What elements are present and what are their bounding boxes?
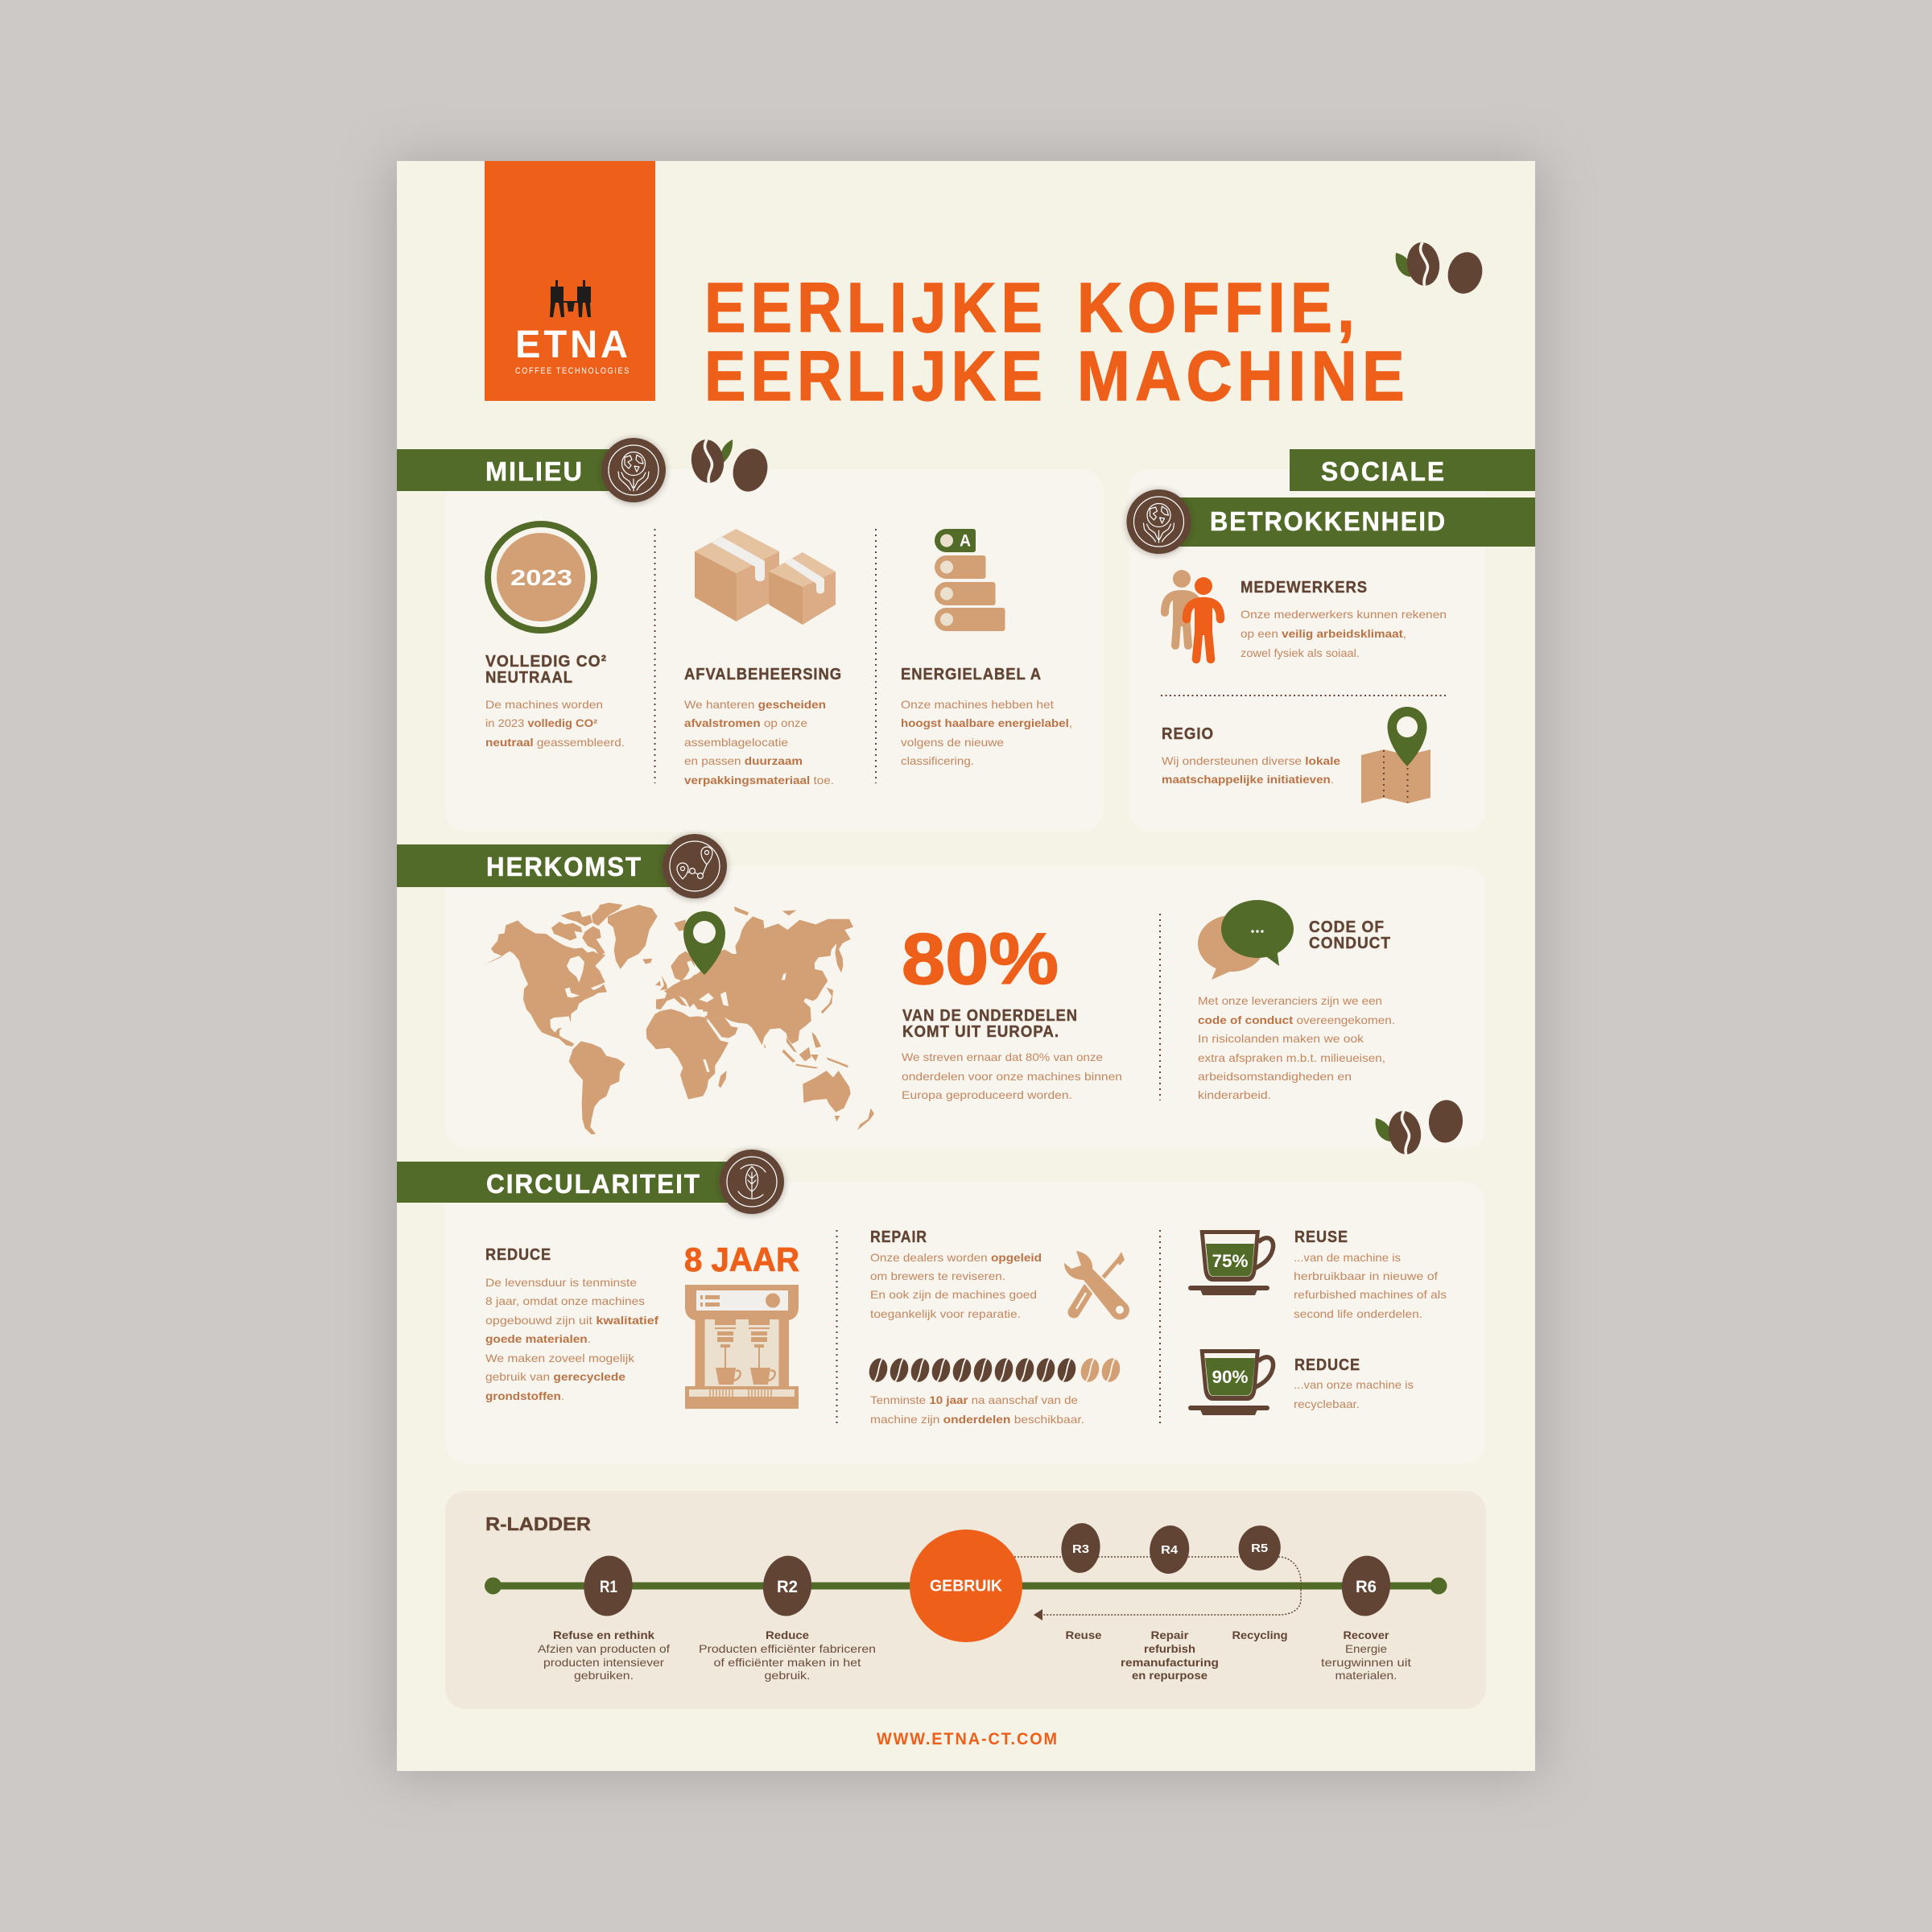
label r6 bbox=[1321, 1629, 1411, 1682]
step r4: R4 bbox=[1161, 1543, 1179, 1557]
map: india bbox=[746, 1023, 779, 1045]
reduce text: gebruik van gerecyclede bbox=[485, 1370, 625, 1383]
label r1 bbox=[538, 1629, 670, 1682]
heading: sociale betrokkenheid: BETROKKENHEID bbox=[1210, 506, 1447, 536]
label r3: Reuse bbox=[1066, 1629, 1102, 1641]
icon: cup 75% bbox=[1188, 1230, 1274, 1295]
body text bbox=[684, 698, 834, 786]
body text: neutraal geassembleerd. bbox=[485, 736, 625, 749]
heading: AFVALBEHEERSING bbox=[684, 666, 842, 683]
icon: bean row 10 of 12 bbox=[867, 1356, 1122, 1384]
reduce text: 8 jaar, omdat onze machines bbox=[485, 1294, 645, 1307]
label r2: of efficiënter maken in het bbox=[713, 1656, 861, 1669]
code of conduct text: Met onze leveranciers zijn we een bbox=[1198, 994, 1382, 1007]
onderdelen text: Tenminste 10 jaar na aanschaf van de bbox=[870, 1393, 1078, 1406]
body text: We hanteren gescheiden bbox=[684, 698, 826, 711]
step r6 bbox=[1339, 1554, 1393, 1618]
reuse text: ...van de machine is bbox=[1294, 1251, 1401, 1264]
divider bbox=[654, 529, 655, 783]
reduce text: goede materialen . bbox=[485, 1332, 591, 1345]
label r6: Energie bbox=[1345, 1642, 1387, 1655]
heading: NEUTRAAL bbox=[485, 669, 573, 687]
code of conduct text: code of conduct overeengekomen. bbox=[1198, 1013, 1395, 1026]
heading bbox=[485, 653, 607, 687]
code of conduct text: extra afspraken m.b.t. milieueisen, bbox=[1198, 1051, 1385, 1064]
heading: circulariteit: CIRCULARITEIT bbox=[486, 1169, 701, 1199]
map: malay peninsula bbox=[786, 1037, 797, 1052]
reuse text bbox=[1294, 1228, 1447, 1320]
step r2 bbox=[760, 1554, 815, 1618]
label r1: gebruiken. bbox=[574, 1669, 634, 1682]
reuse text: herbruikbaar in nieuwe of bbox=[1294, 1269, 1438, 1282]
regio text: Wij ondersteunen diverse lokale bbox=[1162, 754, 1340, 767]
reuse text: second life onderdelen. bbox=[1294, 1307, 1422, 1320]
label r6: materialen. bbox=[1335, 1669, 1397, 1682]
icon: etna figures bbox=[550, 280, 591, 317]
step r5: R5 bbox=[1251, 1542, 1268, 1555]
r-ladder timeline bbox=[485, 1521, 1447, 1642]
world map bbox=[485, 902, 874, 1134]
title: EERLIJKE bbox=[704, 337, 1047, 415]
panel: r-ladder background bbox=[445, 1491, 1486, 1709]
medewerkers text bbox=[1241, 579, 1447, 659]
code of conduct text bbox=[1198, 919, 1395, 1101]
icon: 2023 badge bbox=[488, 524, 594, 630]
milieu: co2 neutraal column bbox=[485, 524, 625, 749]
body text: hoogst haalbare energielabel , bbox=[901, 716, 1072, 729]
icon: 2023 badge: 2023 bbox=[510, 565, 572, 590]
logo wordmark: ETNA bbox=[515, 324, 631, 366]
body text: verpakkingsmateriaal toe. bbox=[684, 774, 834, 786]
step r5 bbox=[1234, 1521, 1285, 1575]
repair text: Onze dealers worden opgeleid bbox=[870, 1251, 1042, 1264]
label r4 bbox=[1121, 1629, 1219, 1682]
reduce text: We maken zoveel mogelijk bbox=[485, 1352, 635, 1364]
body text: en passen duurzaam bbox=[684, 754, 803, 767]
icon: speech bubbles bbox=[1198, 900, 1294, 980]
heading: ENERGIELABEL A bbox=[901, 666, 1042, 683]
icon: cup 90% bbox=[1188, 1349, 1274, 1415]
panel: circulariteit background bbox=[445, 1182, 1486, 1463]
medewerkers text: op een veilig arbeidsklimaat , bbox=[1241, 627, 1406, 640]
repair text: om brewers te reviseren. bbox=[870, 1269, 1005, 1282]
label r4: en repurpose bbox=[1132, 1669, 1208, 1682]
regio text bbox=[1162, 725, 1340, 786]
stat: 80%: 80% bbox=[902, 919, 1059, 1000]
reduce recycling text: ...van onze machine is bbox=[1294, 1378, 1414, 1391]
map: arabia bbox=[708, 1018, 738, 1039]
heading: sociale betrokkenheid: SOCIALE bbox=[1321, 456, 1446, 486]
label r1: producten intensiever bbox=[543, 1656, 664, 1669]
heading: milieu: MILIEU bbox=[485, 456, 584, 486]
step r4 bbox=[1147, 1524, 1191, 1575]
milieu: energielabel column bbox=[901, 529, 1072, 767]
icon: cup 90%: 90% bbox=[1212, 1367, 1248, 1387]
label r4: Repair bbox=[1151, 1629, 1189, 1641]
milieu: afvalbeheersing column bbox=[684, 529, 842, 786]
step r3: R3 bbox=[1072, 1542, 1089, 1556]
icon: hands holding globe bbox=[1127, 489, 1191, 554]
medewerkers text: Onze mederwerkers kunnen rekenen bbox=[1241, 608, 1447, 621]
step r1: R1 bbox=[600, 1578, 617, 1596]
stat: 8 jaar: 8 JAAR bbox=[684, 1241, 799, 1278]
panel: herkomst background bbox=[445, 866, 1486, 1148]
body text: afvalstromen op onze bbox=[684, 716, 807, 729]
onderdelen text: machine zijn onderdelen beschikbaar. bbox=[870, 1413, 1084, 1426]
label r2 bbox=[699, 1629, 876, 1682]
icon: coffee beans herkomst bbox=[1376, 1099, 1464, 1157]
icon: hands holding globe bbox=[601, 438, 666, 502]
reduce text: opgebouwd zijn uit kwalitatief bbox=[485, 1314, 658, 1327]
logo block bbox=[485, 161, 655, 401]
icon: leaf with arrows bbox=[720, 1150, 784, 1214]
code of conduct text: CONDUCT bbox=[1309, 935, 1391, 952]
body text: De machines worden bbox=[485, 698, 603, 711]
icon: energy label bars: A bbox=[960, 531, 971, 551]
body text: Onze machines hebben het bbox=[901, 698, 1054, 711]
icon: coffee beans top right bbox=[1396, 240, 1487, 298]
title bbox=[704, 269, 1410, 415]
label r4: remanufacturing bbox=[1121, 1656, 1219, 1669]
label r6: Recover bbox=[1343, 1629, 1389, 1641]
label r6: terugwinnen uit bbox=[1321, 1656, 1411, 1669]
reuse text: refurbished machines of als bbox=[1294, 1288, 1447, 1301]
heading: herkomst: HERKOMST bbox=[486, 852, 642, 881]
title: KOFFIE, bbox=[1077, 269, 1360, 347]
icon: map with pin bbox=[1361, 707, 1430, 803]
stat text bbox=[902, 1007, 1122, 1101]
heading: milieu bbox=[397, 438, 666, 502]
medewerkers text: MEDEWERKERS bbox=[1241, 579, 1368, 597]
body text bbox=[485, 698, 625, 749]
stat text: We streven ernaar dat 80% van onze bbox=[902, 1051, 1103, 1063]
reduce recycling text bbox=[1294, 1356, 1414, 1410]
step gebruik: GEBRUIK bbox=[930, 1578, 1003, 1596]
label r1: Refuse en rethink bbox=[553, 1629, 654, 1641]
panel: milieu background bbox=[445, 469, 1103, 832]
heading: sociale betrokkenheid bbox=[1127, 449, 1535, 554]
label r2: Producten efficiënter fabriceren bbox=[699, 1642, 876, 1655]
body text: in 2023 volledig CO² bbox=[485, 716, 597, 729]
reduce text: REDUCE bbox=[485, 1246, 551, 1264]
body text: classificering. bbox=[901, 754, 974, 767]
repair text bbox=[870, 1228, 1042, 1320]
step r2: R2 bbox=[777, 1578, 798, 1596]
label r2: Reduce bbox=[766, 1629, 809, 1641]
icon: boxes bbox=[695, 529, 836, 625]
logo tagline: COFFEE TECHNOLOGIES bbox=[515, 366, 630, 376]
heading: circulariteit bbox=[397, 1150, 784, 1214]
icon: wrench and screwdriver bbox=[1064, 1251, 1129, 1319]
reduce text: De levensduur is tenminste bbox=[485, 1276, 637, 1289]
icon: cup 75%: 75% bbox=[1212, 1251, 1248, 1271]
map: indochina bbox=[779, 1028, 799, 1044]
onderdelen text bbox=[870, 1393, 1084, 1426]
stat text: Europa geproduceerd worden. bbox=[902, 1088, 1072, 1101]
step r1 bbox=[581, 1554, 635, 1618]
repair text: En ook zijn de machines goed bbox=[870, 1288, 1037, 1301]
step gebruik bbox=[910, 1530, 1022, 1642]
code of conduct text: arbeidsomstandigheden en bbox=[1198, 1070, 1352, 1083]
regio text: REGIO bbox=[1162, 725, 1214, 743]
code of conduct text: In risicolanden maken we ook bbox=[1198, 1032, 1364, 1045]
body text: assemblagelocatie bbox=[684, 736, 788, 749]
label r5: Recycling bbox=[1232, 1629, 1288, 1641]
map: europe bbox=[656, 966, 710, 1009]
heading: VOLLEDIG CO² bbox=[485, 653, 607, 671]
reduce recycling text: REDUCE bbox=[1294, 1356, 1360, 1374]
step r3 bbox=[1059, 1521, 1103, 1575]
icon: route with pins bbox=[663, 834, 727, 898]
code of conduct text: CODE OF bbox=[1309, 919, 1385, 936]
footer url: WWW.ETNA-CT.COM bbox=[877, 1730, 1059, 1748]
stat text: VAN DE ONDERDELEN bbox=[902, 1007, 1078, 1025]
heading: herkomst bbox=[397, 834, 727, 898]
repair text: toegankelijk voor reparatie. bbox=[870, 1307, 1021, 1320]
label r2: gebruik. bbox=[765, 1669, 810, 1682]
label r4: refurbish bbox=[1144, 1642, 1195, 1655]
divider bbox=[875, 529, 877, 783]
map: siberia and central asia bbox=[698, 916, 853, 1012]
medewerkers text: zowel fysiek als soiaal. bbox=[1241, 646, 1360, 659]
r-ladder heading: R-LADDER bbox=[485, 1513, 591, 1534]
poster sheet bbox=[397, 161, 1535, 1771]
reduce text: grondstoffen . bbox=[485, 1389, 564, 1402]
body text: volgens de nieuwe bbox=[901, 736, 1004, 749]
reduce recycling text: recyclebaar. bbox=[1294, 1397, 1360, 1410]
code of conduct text: kinderarbeid. bbox=[1198, 1088, 1271, 1101]
title: EERLIJKE bbox=[704, 269, 1047, 347]
reduce text bbox=[485, 1246, 658, 1402]
map: china and middle east bbox=[703, 998, 811, 1030]
stat text: onderdelen voor onze machines binnen bbox=[902, 1070, 1122, 1083]
stat text: KOMT UIT EUROPA. bbox=[902, 1023, 1059, 1041]
loop arrow bbox=[1014, 1557, 1301, 1620]
title: MACHINE bbox=[1077, 337, 1410, 415]
icon: location pin on map bbox=[683, 911, 725, 975]
icon: coffee beans milieu bbox=[688, 437, 772, 496]
label r1: Afzien van producten of bbox=[538, 1642, 670, 1655]
body text bbox=[901, 698, 1072, 767]
icon: espresso machine bbox=[685, 1285, 799, 1409]
reuse text: REUSE bbox=[1294, 1228, 1348, 1246]
repair text: REPAIR bbox=[870, 1228, 927, 1246]
panel: sociale betrokkenheid background bbox=[1129, 469, 1486, 832]
icon: people bbox=[1165, 570, 1220, 659]
icon: energy label bars bbox=[935, 529, 1005, 631]
step r6: R6 bbox=[1356, 1578, 1377, 1596]
regio text: maatschappelijke initiatieven . bbox=[1162, 773, 1334, 786]
